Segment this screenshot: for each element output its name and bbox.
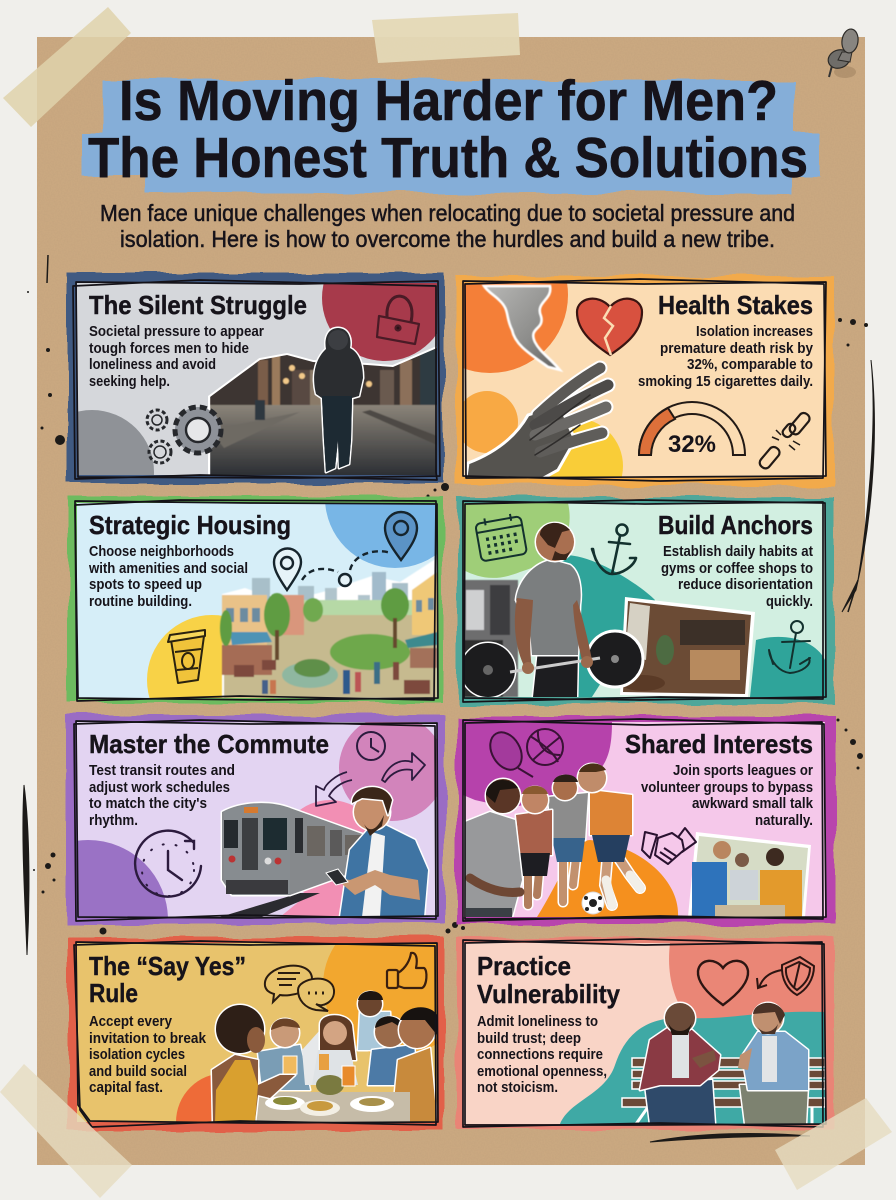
body text: to match the city's [89,795,207,812]
tape: top left [3,7,131,127]
icon: calendar [475,512,527,562]
ink splatter and sketch marks [23,255,874,1142]
icon: thumbs up [387,953,426,988]
panel: Build Anchors [457,497,834,704]
gauge: 32% [639,402,745,458]
panel art [77,283,437,475]
panel: Master the Commute [65,712,448,926]
gauge: 32%: 32% [668,431,716,458]
body text: with amenities and social [88,560,248,577]
illustration: hand with smoke [466,286,608,480]
heading: Build Anchors [658,510,813,540]
panel art [463,943,825,1124]
subtitle: Men face unique challenges when relocating due to societal pressure and [100,200,795,226]
icon: anchor [592,524,636,574]
heading: The Silent Struggle [89,290,307,320]
body text: seeking help. [89,373,170,390]
illustration: friends dining [212,991,437,1122]
body text: spots to speed up [89,576,202,593]
body text: rhythm. [89,812,138,829]
panel: Shared Interests [456,716,836,924]
photo: volunteers [688,832,811,917]
icon: clock large [135,831,201,897]
heading: Vulnerability [477,979,620,1009]
heading: Strategic Housing [89,510,291,540]
panel: Health Stakes [454,274,836,488]
heading [89,951,246,1008]
illustration: neighbourhood street scene [220,558,437,698]
illustration: man with phone [326,787,428,917]
icon: speech bubbles [265,966,334,1011]
body text [641,762,814,829]
panel art [463,283,825,477]
body text: naturally. [755,812,813,829]
heading: Health Stakes [658,290,813,320]
panel: The Silent Struggle [66,271,446,486]
heading: Rule [89,978,138,1008]
body text: smoking 15 cigarettes daily. [638,373,813,390]
body text: Choose neighborhoods [89,543,234,560]
icon: shield and arrow [757,957,814,995]
subtitle [100,200,795,252]
panel art [77,722,437,917]
title: The Honest Truth & Solutions [88,126,808,190]
body text [638,323,814,390]
panel art [461,503,825,700]
icon: basketball [527,729,563,765]
icon: heart [698,961,748,1005]
body text: quickly. [766,593,813,610]
icon: push pin [826,28,860,78]
body text: awkward small talk [692,795,814,812]
illustration: man lifting barbell [461,523,643,697]
icon: broken heart [577,299,642,355]
body text: routine building. [89,593,192,610]
body text: and build social [89,1063,187,1080]
icon: gears [147,407,221,463]
body text [89,323,264,390]
illustration: men talking on bench [622,1003,825,1124]
tape: top centre [372,13,520,63]
body text: invitation to break [89,1030,207,1047]
subtitle: isolation. Here is how to overcome the hurdles and build a new tribe. [120,226,775,252]
body text: build trust; deep [477,1030,581,1047]
body text: Isolation increases [696,323,813,340]
body text: gyms or coffee shops to [661,560,813,577]
title [88,69,808,190]
panel art [463,722,825,917]
body text: emotional openness, [477,1063,607,1080]
icon: arrows [316,753,425,806]
body text [89,1013,207,1096]
panel: The "Say Yes" Rule [66,934,446,1133]
icon: padlock [377,296,419,344]
icon: clock small [357,732,385,760]
heading: The “Say Yes” [89,951,246,981]
heading: Shared Interests [625,729,813,759]
tape: bottom right [775,1098,892,1190]
panel art [77,503,437,698]
body text: Establish daily habits at [663,543,813,560]
illustration: group of friends playing football [465,763,640,917]
icon: anchor [769,621,810,673]
panel: Practice Vulnerability [456,937,834,1129]
body text: Admit loneliness to [477,1013,598,1030]
body text: reduce disorientation [678,576,813,593]
body text: loneliness and avoid [89,356,216,373]
illustration: train [220,803,365,917]
body text [661,543,813,610]
body text: Join sports leagues or [673,762,813,779]
panel art [77,943,437,1122]
body text [89,762,235,829]
icon: location pins and dashed route [274,512,417,590]
title: Is Moving Harder for Men? [119,69,778,133]
photo: coffee shop [620,597,755,697]
photo: gym [463,580,518,697]
body text: Test transit routes and [89,762,235,779]
heading: Master the Commute [89,729,329,759]
body text: not stoicism. [477,1079,558,1096]
body text [477,1013,607,1096]
body text: capital fast. [89,1079,163,1096]
heading [477,951,620,1009]
illustration: hooded man walking [314,328,363,472]
body text: 32%, comparable to [687,356,813,373]
icon: tennis racket [489,731,534,778]
icon: coffee cup [168,630,205,683]
icon: broken chain [758,411,812,470]
tape: bottom left [0,1064,132,1198]
body text: Societal pressure to appear [89,323,264,340]
body text: connections require [477,1046,603,1063]
heading: Practice [477,951,571,981]
title brush highlight [80,80,818,193]
body text: Accept every [89,1013,173,1030]
icon: handshake [642,828,696,864]
body text: premature death risk by [660,340,814,357]
body text [88,543,248,610]
body text: volunteer groups to bypass [641,779,813,796]
body text: isolation cycles [89,1046,185,1063]
body text: tough forces men to hide [89,340,249,357]
panel: Strategic Housing [66,494,446,704]
body text: adjust work schedules [89,779,230,796]
